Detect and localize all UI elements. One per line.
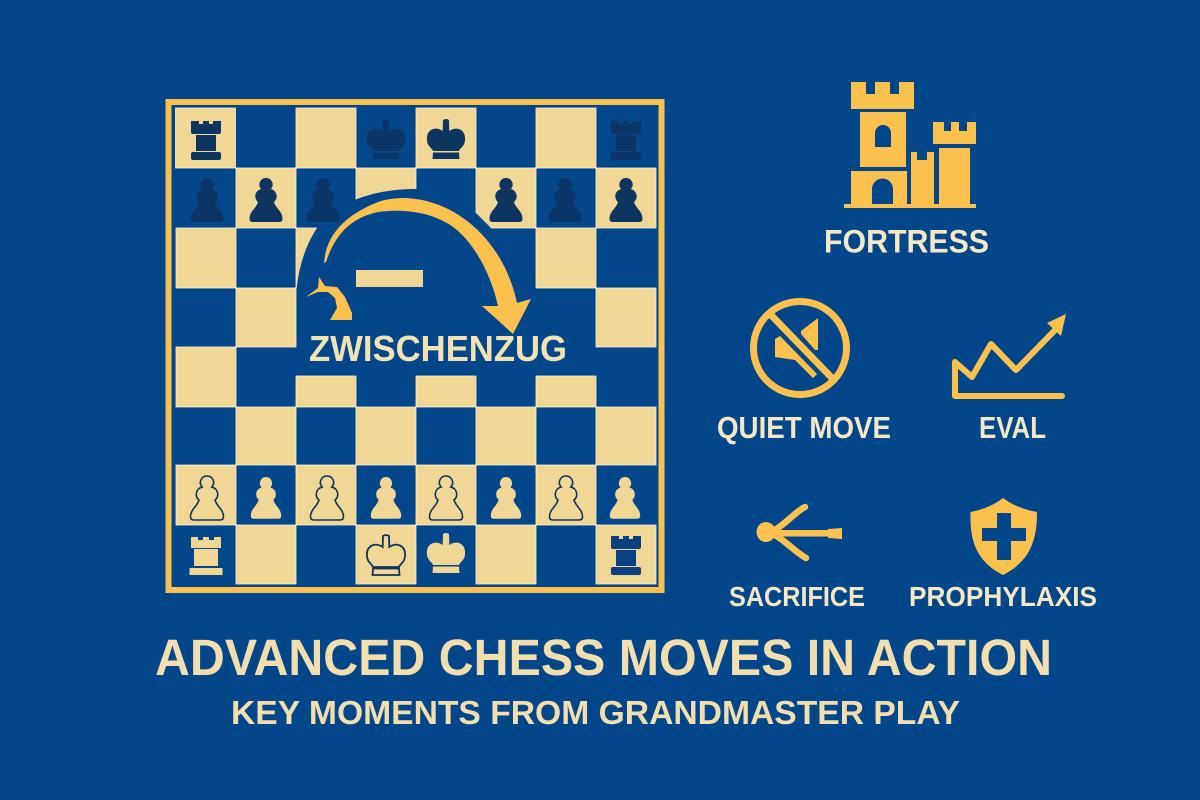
- title: ADVANCED CHESS MOVES IN ACTION: [155, 629, 1052, 686]
- label: prophylaxis: PROPHYLAXIS: [909, 581, 1097, 612]
- white rook h1: [611, 536, 641, 575]
- arrow: curved move: [324, 198, 531, 334]
- white pawn f2: [491, 477, 521, 519]
- black king d8: [367, 119, 405, 159]
- white pawn a2: [190, 476, 224, 520]
- chess board: [168, 102, 662, 590]
- black pawn f7: [490, 178, 522, 222]
- eval item: [955, 314, 1066, 445]
- icon: muted speaker: [754, 302, 846, 394]
- white pawn h2: [610, 477, 640, 519]
- white pawn c2: [310, 476, 344, 520]
- black pawn a7: [190, 178, 224, 222]
- cleared central area: [296, 189, 535, 347]
- board squares: [176, 108, 656, 584]
- quiet move item: [717, 302, 891, 445]
- icon: fortress: [844, 82, 976, 208]
- white pawn g2: [550, 476, 582, 520]
- subtitle: KEY MOMENTS FROM GRANDMASTER PLAY: [231, 695, 960, 732]
- black pawn g7: [548, 178, 582, 222]
- black pawn b7: [250, 178, 282, 222]
- white pawn e2: [430, 476, 462, 520]
- black king e8: [427, 119, 465, 159]
- white pawn d2: [371, 477, 401, 519]
- black rook h8: [611, 121, 641, 160]
- icon: rising chart: [955, 314, 1066, 396]
- label: eval: EVAL: [979, 411, 1046, 445]
- black pawn h7: [610, 178, 642, 222]
- label: zwischenzug: ZWISCHENZUG: [309, 328, 567, 369]
- white rook a1: [190, 537, 222, 575]
- icon: shield with cross: [970, 498, 1037, 575]
- icon: sacrifice: [756, 507, 842, 558]
- icon: knight: [306, 277, 352, 320]
- sacrifice item: [729, 507, 865, 612]
- label: fortress: FORTRESS: [824, 224, 989, 260]
- white pawn b2: [251, 477, 281, 519]
- board frame: [168, 102, 662, 590]
- fortress item: [824, 82, 989, 260]
- white king d1: [367, 535, 405, 575]
- black pawn c7: [306, 178, 340, 222]
- white king e1: [427, 533, 465, 573]
- label: sacrifice: SACRIFICE: [729, 581, 865, 612]
- icon: minus bar: [356, 270, 423, 287]
- prophylaxis item: [909, 498, 1097, 612]
- label: quiet move: QUIET MOVE: [717, 411, 891, 445]
- black rook a8: [191, 121, 221, 160]
